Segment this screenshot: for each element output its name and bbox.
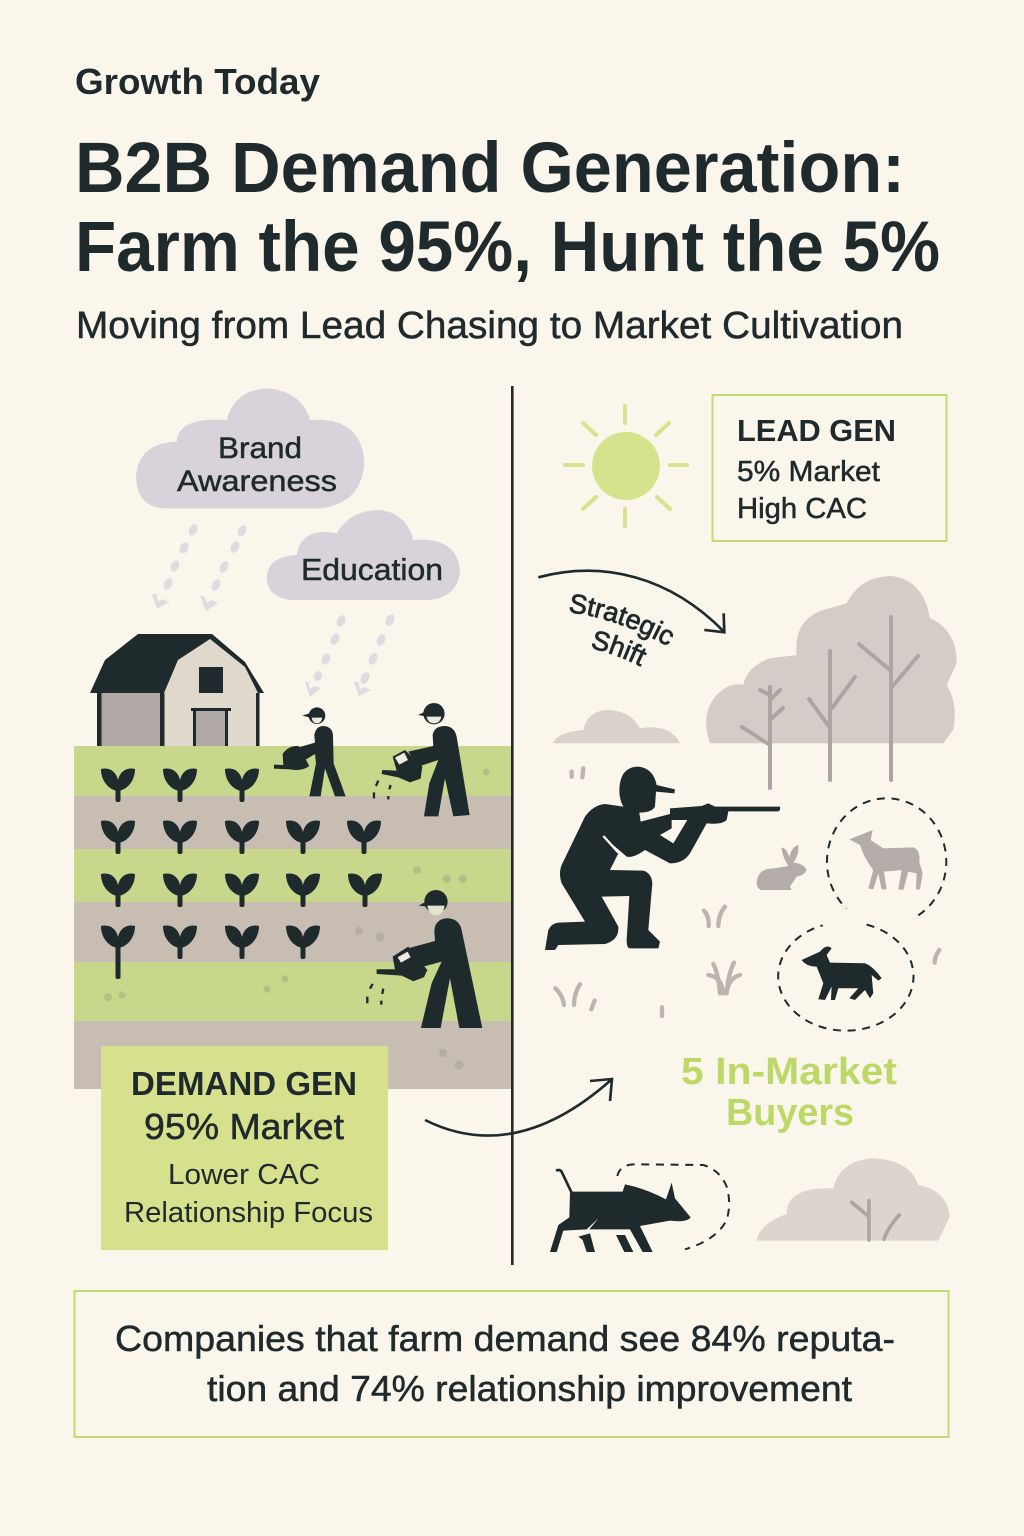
label: strategic shift: Strategic bbox=[570, 594, 674, 645]
callout: demand gen: Relationship Focus bbox=[124, 1197, 373, 1229]
callout: demand gen bbox=[101, 1046, 388, 1250]
sprouts bbox=[101, 768, 382, 979]
cloud: brand awareness bbox=[136, 388, 364, 508]
title: B2B Demand Generation: bbox=[75, 129, 905, 208]
hunting dog with scent trail bbox=[550, 1164, 729, 1252]
farm field stripes bbox=[74, 746, 511, 1089]
callout: bottom statistic bbox=[74, 1291, 948, 1437]
arrow: strategic shift bbox=[538, 571, 724, 632]
callout: lead gen: 5% Market bbox=[737, 456, 880, 488]
centre divider bbox=[511, 386, 514, 1265]
deer in dashed target bbox=[827, 798, 946, 915]
brand name: Growth Today bbox=[75, 61, 320, 102]
subtitle: Moving from Lead Chasing to Market Cultivation bbox=[76, 305, 903, 347]
label: 5 in-market buyers: Buyers bbox=[726, 1092, 854, 1134]
grass tufts bbox=[555, 768, 939, 1016]
cloud: education: Education bbox=[301, 552, 443, 587]
rabbit bbox=[757, 845, 807, 890]
farmer 1 watering bbox=[274, 707, 346, 796]
callout: lead gen bbox=[712, 395, 946, 541]
hunter with rifle bbox=[545, 767, 780, 950]
arrow: shift across divider bbox=[425, 1079, 612, 1136]
callout: demand gen: Lower CAC bbox=[168, 1159, 320, 1191]
callout: lead gen: LEAD GEN bbox=[737, 413, 896, 448]
forest trees bbox=[553, 576, 957, 788]
farmer 3 watering bbox=[367, 890, 482, 1028]
title: Farm the 95%, Hunt the 5% bbox=[75, 208, 940, 287]
icon: sun bbox=[565, 406, 687, 526]
cloud: brand awareness: Brand bbox=[218, 432, 302, 465]
label: 5 in-market buyers bbox=[681, 1051, 897, 1134]
callout: lead gen: High CAC bbox=[737, 493, 867, 525]
callout: demand gen: DEMAND GEN bbox=[131, 1065, 357, 1102]
in-market animal in dashed target bbox=[778, 925, 914, 1031]
cloud: brand awareness: Awareness bbox=[177, 465, 337, 498]
callout: demand gen: 95% Market bbox=[144, 1106, 344, 1147]
title bbox=[75, 129, 940, 287]
shrub bbox=[757, 1158, 950, 1241]
barn bbox=[90, 634, 264, 746]
rain drops bbox=[152, 523, 396, 697]
farmer 2 watering bbox=[374, 703, 470, 816]
label: strategic shift: Shift bbox=[592, 631, 647, 667]
label: strategic shift bbox=[570, 594, 674, 667]
label: 5 in-market buyers: 5 In-Market bbox=[681, 1051, 897, 1093]
callout: bottom statistic: Companies that farm demand see 84% reputa- bbox=[115, 1318, 895, 1359]
callout: bottom statistic: tion and 74% relationship improvement bbox=[207, 1368, 852, 1409]
cloud: education bbox=[267, 510, 460, 600]
